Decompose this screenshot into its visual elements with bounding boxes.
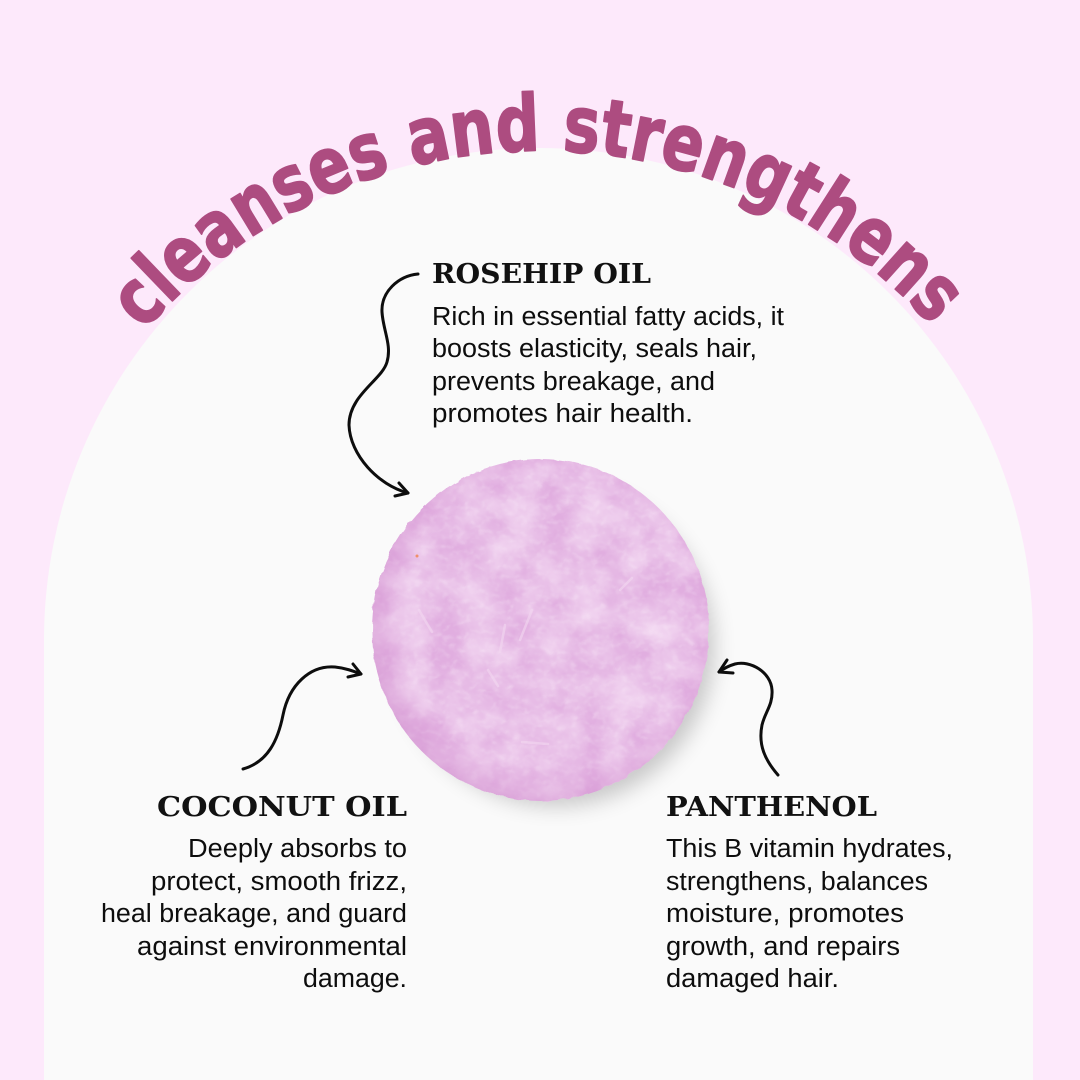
description: coconut oil: heal breakage, and guard <box>101 900 407 928</box>
description: rosehip oil: prevents breakage, and <box>432 368 715 396</box>
text block: rosehip oil <box>432 258 784 428</box>
heading: panthenol: PANTHENOL <box>666 791 877 823</box>
panel: white arch <box>44 148 1033 1080</box>
description: coconut oil <box>101 835 407 993</box>
description: rosehip oil: boosts elasticity, seals hair, <box>432 335 757 363</box>
description: coconut oil: against environmental <box>137 933 407 961</box>
arrow: rosehip oil to bar <box>349 274 418 496</box>
description: rosehip oil: promotes hair health. <box>432 400 693 428</box>
description: panthenol: strengthens, balances <box>666 868 928 896</box>
description: panthenol <box>666 835 953 993</box>
description: panthenol: moisture, promotes <box>666 900 904 928</box>
title: curved heading: cleanses and strengthens <box>120 90 960 323</box>
description: panthenol: This B vitamin hydrates, <box>666 835 953 863</box>
image: shampoo bar <box>360 450 720 810</box>
text block: coconut oil <box>101 791 407 993</box>
text block: panthenol <box>666 791 953 993</box>
description: coconut oil: protect, smooth frizz, <box>151 868 407 896</box>
description: panthenol: growth, and repairs <box>666 933 900 961</box>
description: rosehip oil <box>432 303 784 428</box>
arrow: coconut oil to bar <box>243 664 361 769</box>
description: coconut oil: Deeply absorbs to <box>188 835 407 863</box>
description: rosehip oil: Rich in essential fatty acids, it <box>432 303 784 331</box>
description: panthenol: damaged hair. <box>666 965 839 993</box>
description: coconut oil: damage. <box>303 965 407 993</box>
heading: rosehip oil: ROSEHIP OIL <box>432 258 651 290</box>
heading: coconut oil: COCONUT OIL <box>157 791 407 823</box>
arrow: panthenol to bar <box>719 660 778 775</box>
